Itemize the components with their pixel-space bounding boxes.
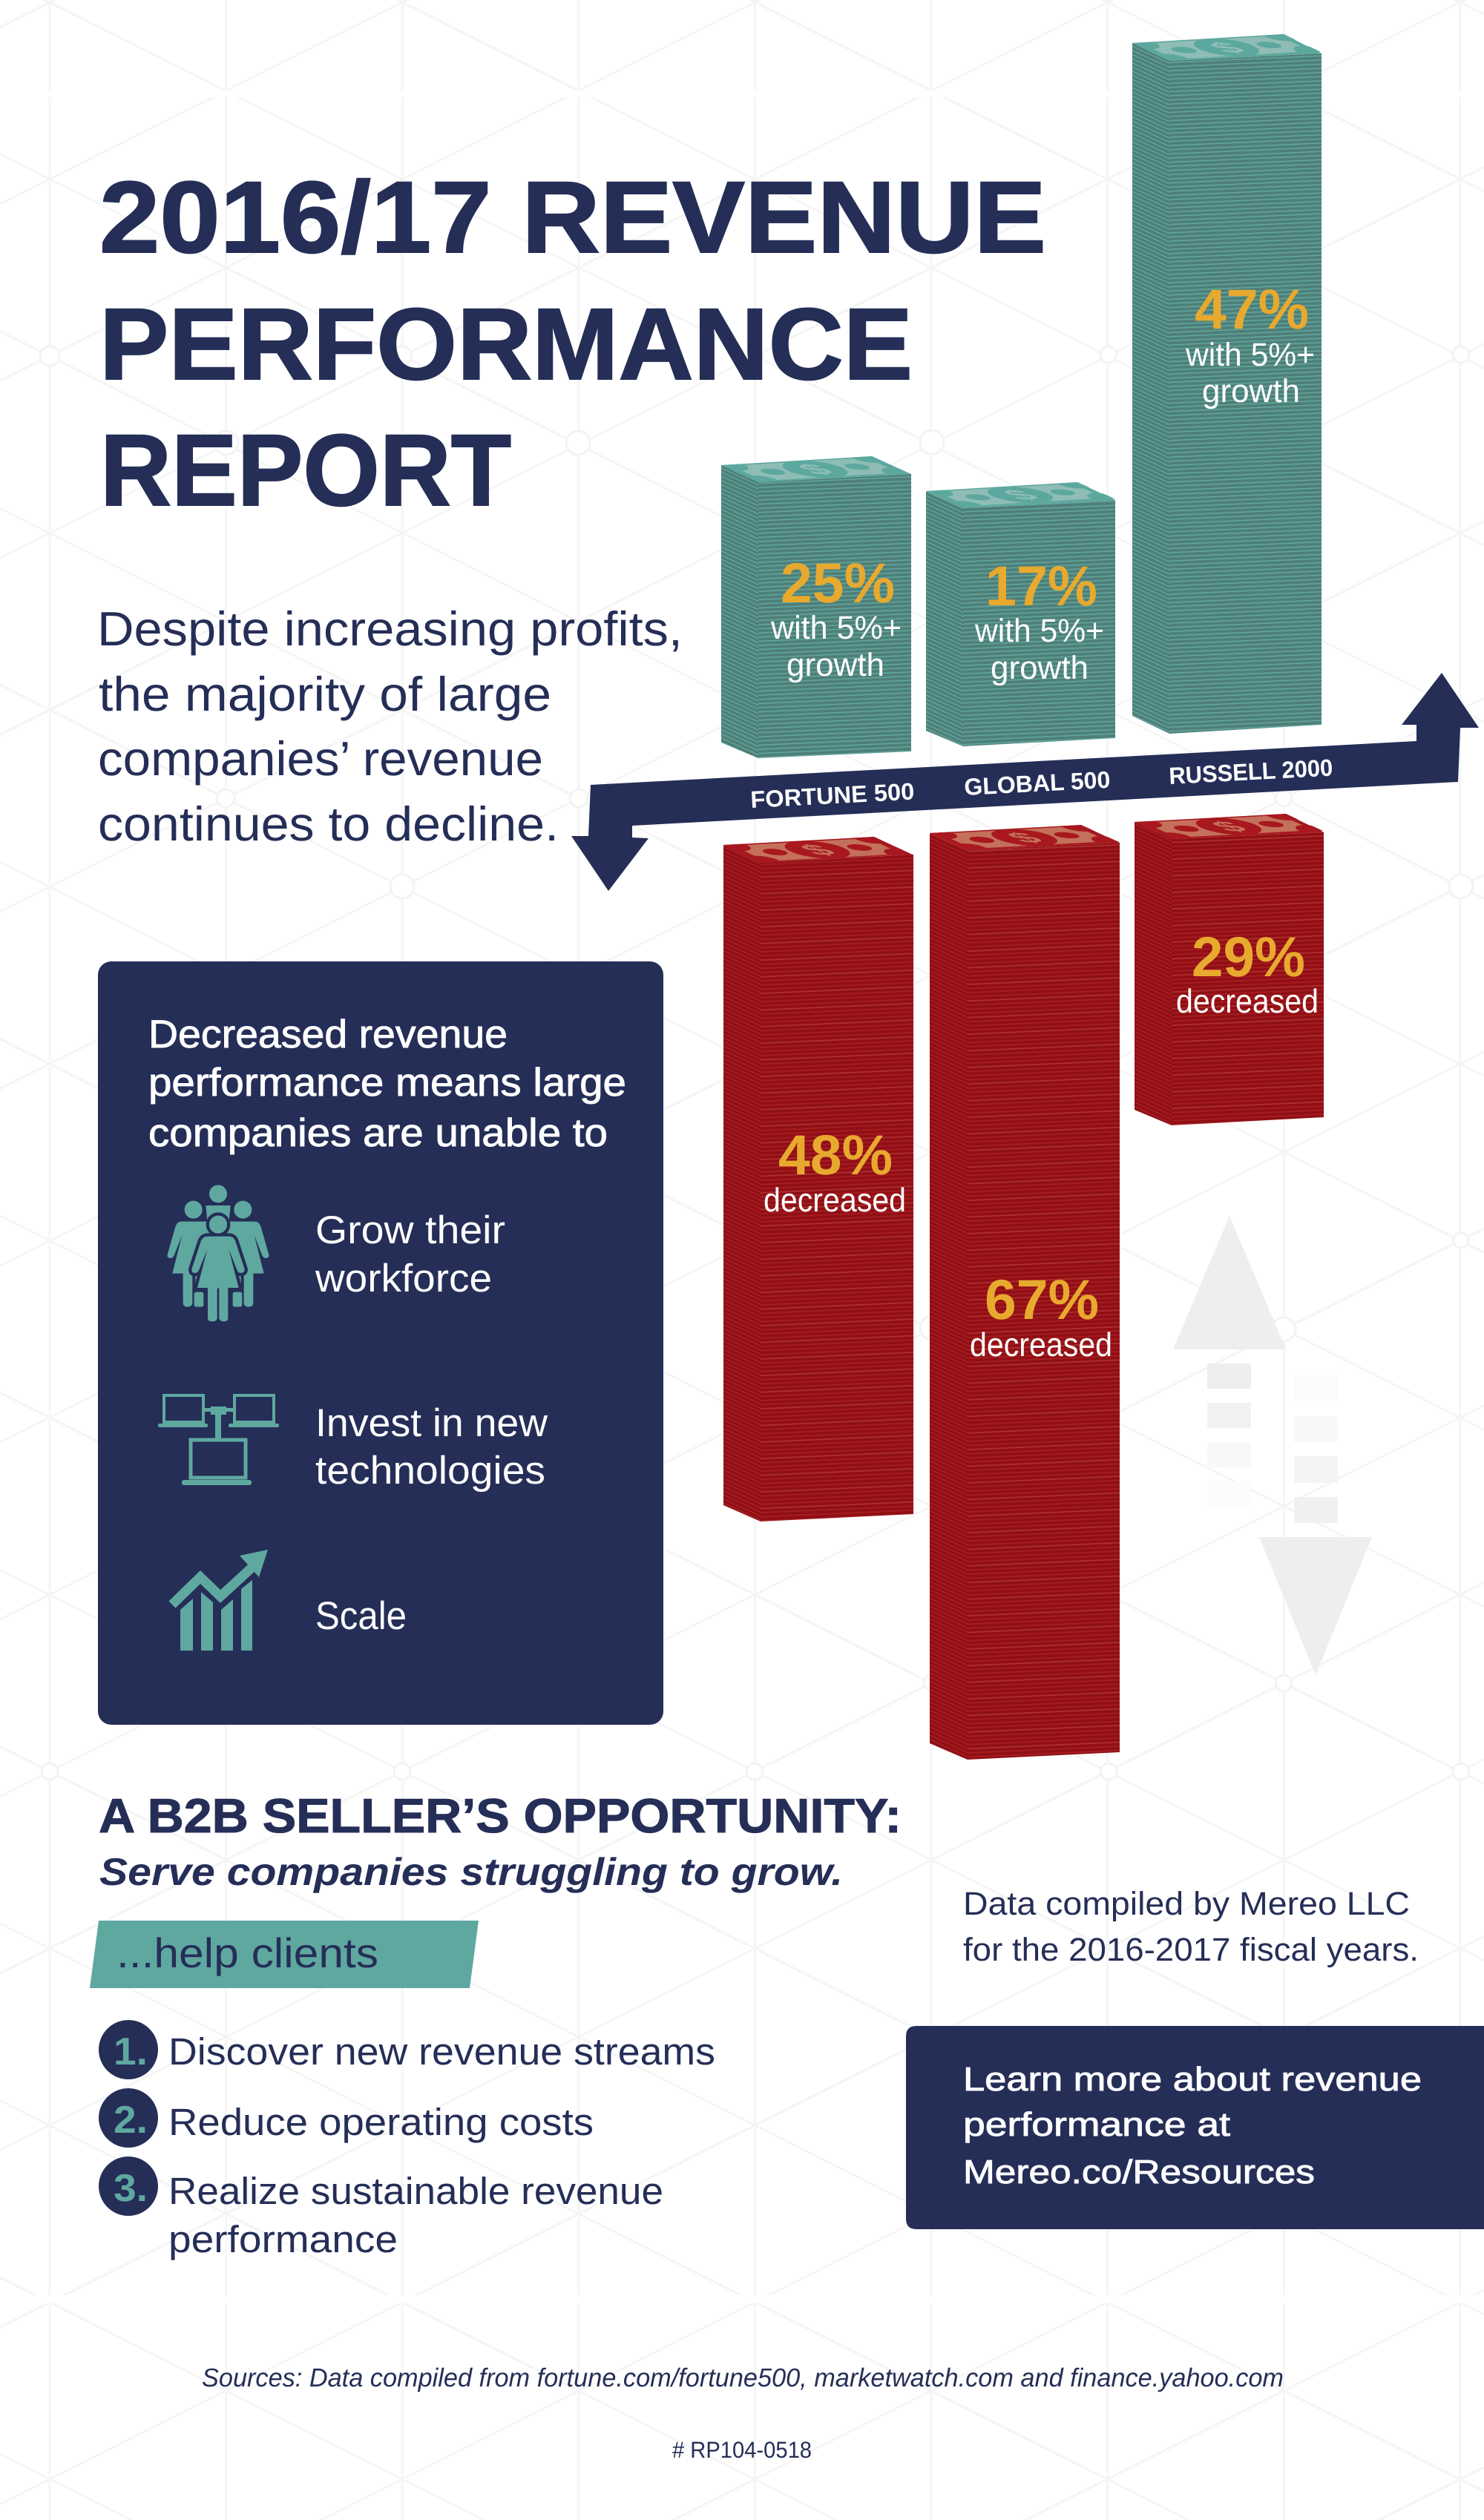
text: invest in new technologies: technologies [315,1449,545,1493]
data credit: Data compiled by Mereo LLC [963,1886,1410,1922]
label: 29%: decreased [1176,982,1319,1020]
green stack: Russell 2000 [1132,34,1322,734]
green stack: Global 500: $ [993,487,1048,503]
intro text: Despite increasing profits, [97,602,683,656]
double-headed arrow band [571,673,1479,891]
title: REPORT [100,414,511,527]
label: 17%: growth [991,650,1089,686]
report code: # RP104-0518 [672,2437,812,2463]
sources: Sources: Data compiled from fortune.com/fortune500, marketwatch.com and finance.yahoo.com [202,2363,1284,2392]
text: invest in new technologies: Invest in new [315,1401,548,1445]
list item 1 [99,2020,715,2079]
icon: growth chart [172,1550,268,1651]
label: 29%: 29% [1192,926,1305,989]
call to action box: performance at [963,2105,1231,2143]
help clients banner [90,1921,479,1988]
label: 17%: 17% [985,555,1097,618]
intro text [97,602,683,851]
intro text: the majority of large [99,667,551,721]
label: 25%: growth [787,647,884,683]
label: 47% [1185,278,1315,409]
axis label: Russell 2000: RUSSELL 2000 [1168,754,1333,789]
call to action box [906,2026,1484,2229]
label: 17%: with 5%+ [974,613,1104,649]
label: 67%: decreased [970,1326,1112,1363]
axis label: Fortune 500: FORTUNE 500 [749,777,915,813]
green stack: Fortune 500 [721,456,911,758]
green stack: Fortune 500: $ [788,461,842,478]
data credit [963,1886,1419,1968]
list item 3: 3. [114,2167,148,2210]
list item 2: 2. [114,2099,148,2142]
panel heading: performance means large [148,1061,626,1105]
label: 48%: decreased [764,1181,906,1219]
panel heading: companies are unable to [148,1111,608,1155]
label: 47%: 47% [1195,278,1309,341]
list item 2 [99,2088,594,2148]
label: 25%: 25% [781,552,895,615]
text: grow their workforce [315,1208,505,1300]
intro text: companies’ revenue [98,731,543,786]
ghost up arrow [1173,1216,1286,1507]
ghost down arrow [1259,1375,1372,1675]
axis label: Global 500: GLOBAL 500 [963,766,1111,800]
text: scale: Scale [315,1594,407,1638]
text: invest in new technologies [315,1401,548,1493]
icon: networked laptops [158,1395,279,1485]
label: 67%: 67% [985,1269,1099,1332]
title [99,161,1046,527]
call to action box: Learn more about revenue [963,2060,1422,2098]
label: 48%: 48% [778,1124,893,1187]
call to action box: Mereo.co/Resources [963,2153,1315,2191]
panel heading [148,1013,626,1155]
red stack: Fortune 500: $ [790,841,844,858]
label: 47%: growth [1202,373,1300,409]
text: grow their workforce: Grow their [315,1208,505,1252]
list item 3: Realize sustainable revenue [168,2170,663,2212]
label: 29% [1176,926,1319,1020]
label: 17% [974,555,1104,686]
list item 3 [99,2157,663,2260]
data credit: for the 2016-2017 fiscal years. [963,1932,1419,1968]
list item 3: performance [168,2218,398,2260]
title: 2016/17 REVENUE [99,161,1046,274]
panel heading: Decreased revenue [148,1013,508,1056]
help clients banner: ...help clients [116,1930,378,1976]
title: PERFORMANCE [99,288,913,401]
list item 1: Discover new revenue streams [168,2030,715,2073]
red stack: Russell 2000: $ [1201,818,1256,835]
panel: decreased revenue effects [98,961,663,1725]
subheading: Serve companies struggling to grow. [99,1851,843,1894]
list item 1: 1. [114,2030,148,2073]
green stack: Russell 2000: $ [1199,39,1254,56]
label: 67% [970,1269,1112,1363]
label: 25%: with 5%+ [770,610,902,646]
label: 48% [764,1124,906,1219]
heading: B2B opportunity: A B2B SELLER’S OPPORTUNITY: [99,1789,902,1843]
text: grow their workforce: workforce [315,1257,492,1300]
red stack: Global 500: $ [997,829,1052,846]
red stack: Russell 2000 [1135,814,1324,1125]
red stack: Fortune 500 [723,837,913,1521]
intro text: continues to decline. [98,797,559,851]
icon: workforce group [167,1185,269,1321]
label: 47%: with 5%+ [1185,337,1315,373]
list item 2: Reduce operating costs [168,2101,594,2143]
red stack: Global 500 [930,825,1120,1760]
label: 25% [770,552,902,683]
green stack: Global 500 [926,482,1115,746]
